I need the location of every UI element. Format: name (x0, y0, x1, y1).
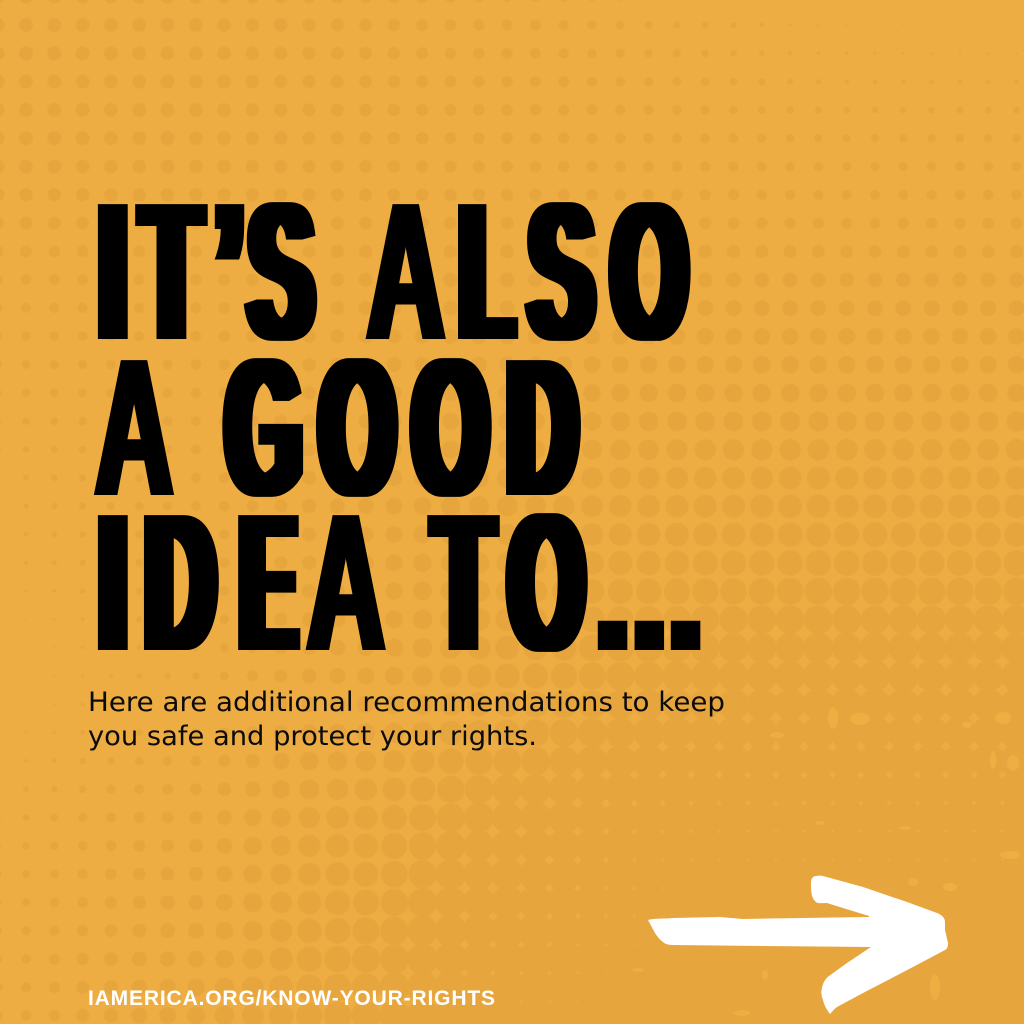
title: E (241, 473, 296, 692)
subtitle text (88, 687, 725, 752)
subtitle text: you safe and protect your rights. (88, 721, 537, 752)
title: A (95, 318, 173, 537)
title: ID (99, 472, 215, 692)
subtitle text: Here are additional recommendations to keep (88, 687, 725, 718)
title: L (460, 163, 513, 382)
title: GOOD (226, 317, 577, 537)
title: IT’S (99, 161, 313, 381)
title: TO... (434, 472, 699, 692)
website url: IAMERICA.ORG/KNOW-YOUR-RIGHTS (88, 987, 495, 1010)
background grunge specks (632, 707, 1020, 1016)
arrow pointing right (648, 876, 948, 1014)
title: A (367, 162, 445, 381)
title (95, 161, 699, 692)
title: SO (529, 161, 687, 381)
title: A (307, 473, 385, 692)
